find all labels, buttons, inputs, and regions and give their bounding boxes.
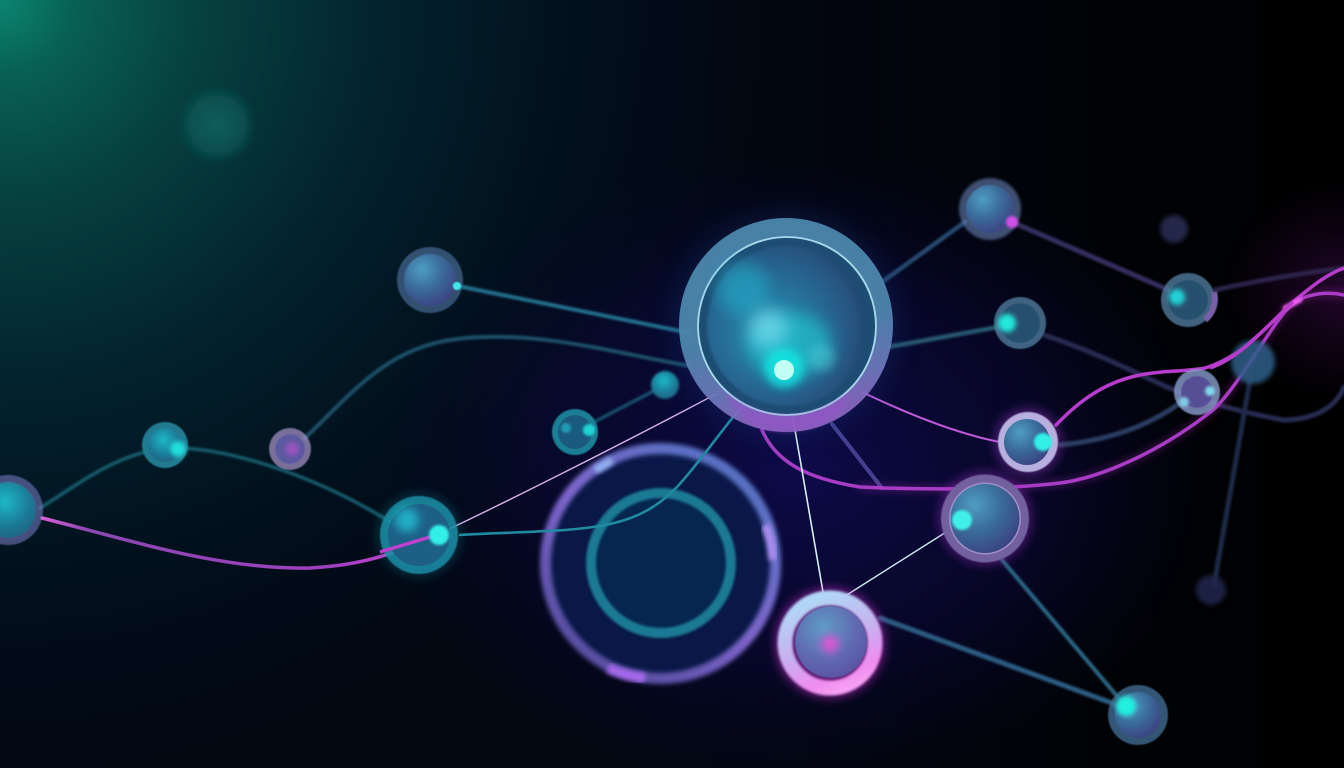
node: left edge <box>0 475 43 545</box>
node: purple ringed <box>937 470 1033 566</box>
node: right blurred <box>1231 340 1275 384</box>
crossing highlight over blurred node <box>1210 302 1293 368</box>
central sphere <box>674 213 898 437</box>
node: top centre <box>397 247 463 313</box>
node: pink small <box>269 428 311 470</box>
blurred background sphere <box>178 86 256 164</box>
connector lines: teal and muted <box>40 222 1344 706</box>
node: left teal <box>142 422 188 468</box>
node: right small pale <box>1174 369 1220 415</box>
node: small teal pair <box>552 371 679 455</box>
node: centre-left ringed <box>376 492 462 578</box>
node: top right <box>959 178 1021 240</box>
connector lines: fine white <box>445 372 962 598</box>
large ring target <box>546 448 776 678</box>
node: white ringed <box>993 407 1063 477</box>
node: bright pink <box>774 587 886 699</box>
node: far right teal <box>1161 273 1215 327</box>
connector lines: magenta <box>42 268 1344 568</box>
node: bottom right teal <box>1108 685 1168 745</box>
node: faint small top right <box>1160 215 1188 243</box>
node: bottom right faint <box>1196 575 1226 605</box>
node: right teal <box>994 297 1046 349</box>
